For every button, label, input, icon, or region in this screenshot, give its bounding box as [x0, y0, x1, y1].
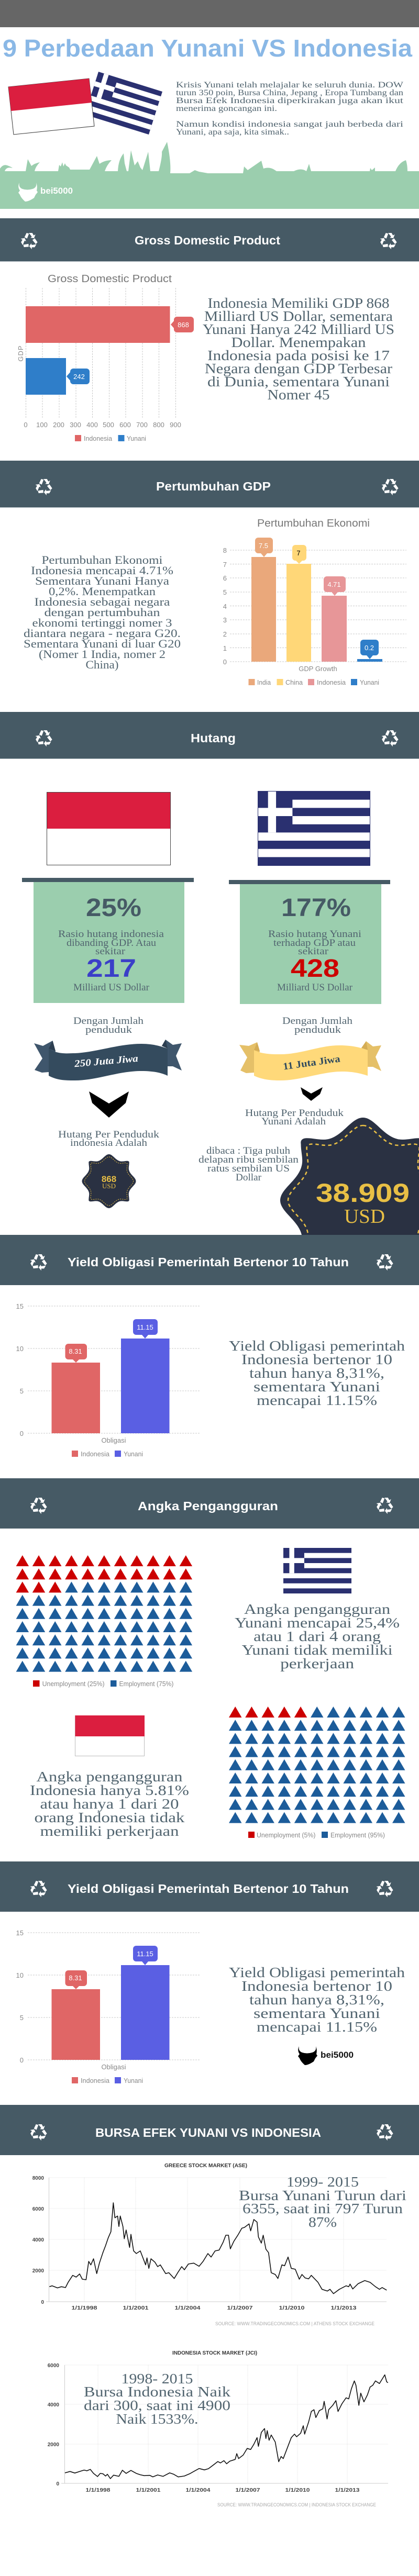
bar chart: GDP: Gross Domestic Product	[48, 273, 172, 285]
text: Indonesia stock summary: Bursa Indonesia Naik	[84, 2384, 231, 2400]
icon: recycle right	[375, 1254, 394, 1272]
flag: Indonesia small	[75, 1715, 145, 1756]
bar chart: economic growth: 8	[223, 547, 227, 554]
text: GDP explanation: Indonesia pada posisi ke 17	[207, 348, 390, 363]
text: debt per capita right: Hutang Per Penduduk	[245, 1108, 344, 1119]
bar chart: GDP: 900	[170, 421, 181, 429]
icon: recycle right	[380, 479, 400, 496]
line chart: Greece stock market: 1/1/1998	[71, 2305, 97, 2311]
text: GDP explanation: di Dunia, sementara Yunani	[207, 374, 390, 389]
bar chart: GDP	[17, 273, 194, 442]
bar chart: economic growth: Yunani	[360, 678, 379, 686]
text: Indonesia unemployment: memiliki perkerjaan	[40, 1823, 179, 1839]
text: GDP explanation: Yunani Hanya 242 Milliard US	[203, 321, 394, 337]
text: bond yield explanation	[229, 1338, 405, 1408]
ribbon: 11 Juta Jiwa: 11 Juta Jiwa	[282, 1053, 341, 1073]
line chart: Indonesia stock market: 1/1/2004	[185, 2488, 211, 2493]
line chart: Greece stock market: 1/1/2001	[123, 2305, 149, 2311]
panel: Greece debt ratio: sekitar	[298, 946, 329, 957]
bar chart: GDP: 242	[73, 373, 85, 381]
text: economic growth explanation: 0,2%. Menempatkan	[49, 585, 156, 598]
text: Greece stock summary: 87%	[308, 2214, 337, 2230]
bar chart: economic growth: 5	[223, 588, 227, 596]
logo: bei5000 white: bei5000	[40, 186, 73, 196]
line chart: Indonesia stock market	[48, 2350, 388, 2507]
icon: recycle left	[29, 2124, 48, 2142]
section header: Yield Obligasi	[0, 1235, 419, 1285]
text: economic growth explanation: Indonesia mencapai 4.71%	[31, 564, 173, 577]
flag: Indonesia	[47, 793, 171, 865]
line chart: Indonesia stock market: 1/1/2010	[285, 2488, 310, 2493]
line chart: Greece stock market: 0	[41, 2300, 44, 2305]
intro text: Bursa Efek Indonesia diperkirakan juga akan ikut	[176, 96, 404, 105]
text: economic growth explanation: dengan pertumbuhan	[44, 606, 160, 619]
icon: recycle left	[34, 730, 53, 748]
logo: bei5000 white	[18, 183, 73, 202]
text: Greece stock summary: 1999- 2015	[286, 2174, 359, 2190]
waffle chart: Greece unemployment	[16, 1555, 192, 1672]
text: economic growth explanation: (Nomer 1 India, nomer 2	[39, 648, 166, 661]
line chart: Indonesia stock market: 1/1/2001	[136, 2488, 161, 2493]
text: Greece unemployment: Angka pengangguran	[244, 1601, 391, 1617]
bar chart: GDP: 600	[119, 421, 131, 429]
text: population label right: penduduk	[294, 1024, 341, 1035]
text: GDP explanation: Dollar. Menempakan	[231, 334, 366, 350]
intro text: Krisis Yunani telah melajalar ke seluruh dunia. DOW	[176, 81, 404, 90]
badge: 868 USD: 868	[102, 1174, 116, 1184]
panel: Indonesia debt ratio: 217	[86, 955, 136, 983]
section header: Angka Pengangguran	[0, 1478, 419, 1529]
text: Indonesia unemployment: atau hanya 1 dari 20	[40, 1796, 179, 1812]
bar chart: GDP: 700	[136, 421, 148, 429]
text: reading of the number	[199, 1145, 299, 1183]
bar chart: GDP: 868	[178, 321, 189, 329]
bar chart: economic growth: 0	[223, 658, 227, 666]
bar chart: economic growth: 7	[223, 561, 227, 568]
line chart: Greece stock market: GREECE STOCK MARKET (ASE)	[164, 2163, 247, 2169]
heading: Yield Obligasi Pemerintah Bertenor 10 Tahun	[68, 1882, 349, 1895]
intro text: menerima goncangan ini.	[176, 104, 277, 113]
bar chart: economic growth: 3	[223, 616, 227, 624]
badge: 38.909 USD	[280, 1118, 419, 1283]
text: debt per capita right	[245, 1108, 344, 1127]
line chart: Indonesia stock market: 1/1/2013	[335, 2488, 360, 2493]
bar chart: GDP: Yunani	[127, 434, 146, 442]
heading: Pertumbuhan GDP	[156, 479, 271, 493]
panel: Indonesia debt ratio: dibanding GDP. Atau	[67, 938, 157, 949]
badge: 38.909 USD: USD	[344, 1206, 385, 1228]
bar chart: economic growth: 4	[223, 603, 227, 610]
bar chart: economic growth: GDP Growth	[299, 665, 337, 673]
text: Indonesia unemployment: orang Indonesia tidak	[35, 1810, 185, 1825]
text: GDP explanation	[203, 295, 394, 403]
panel: Indonesia debt ratio: Milliard US Dollar	[73, 982, 150, 993]
text: population label left: penduduk	[85, 1024, 133, 1035]
icon: recycle left	[34, 479, 53, 496]
panel: Greece debt ratio	[229, 880, 390, 1004]
legend: Indonesia unemployment: Unemployment (5%)	[257, 1831, 315, 1839]
ribbon: 250 Juta Jiwa: 250 Juta Jiwa	[73, 1053, 139, 1069]
line chart: Indonesia stock market: 1/1/2007	[236, 2488, 260, 2493]
section header: Gross Domestic Product	[0, 218, 419, 262]
logo: bei5000 black: bei5000	[321, 2050, 354, 2060]
text: Greece unemployment	[235, 1601, 400, 1671]
line chart: Greece stock market: 1/1/2007	[227, 2305, 253, 2311]
bar chart: GDP: 100	[36, 421, 48, 429]
panel: Indonesia debt ratio: 25%	[86, 894, 141, 922]
intro text: Yunani, apa saja, kita simak..	[176, 128, 289, 137]
text: reading of the number: ratus sembilan US	[207, 1163, 290, 1174]
icon: recycle right	[375, 1881, 394, 1898]
panel: Indonesia debt ratio: Rasio hutang indonesia	[58, 929, 164, 940]
bar chart: GDP: 0	[24, 421, 28, 429]
flag: Greece	[258, 791, 370, 866]
line chart: Greece stock market: SOURCE: WWW.TRADINGECONOMICS.COM | ATHENS STOCK EXCHANGE	[215, 2321, 374, 2326]
bar chart: GDP: 400	[86, 421, 98, 429]
ribbon: 250 Juta Jiwa	[34, 1040, 182, 1080]
line chart: Greece stock market: 1/1/2004	[175, 2305, 201, 2311]
panel: Greece debt ratio: Rasio hutang Yunani	[268, 929, 361, 940]
legend: Greece unemployment	[33, 1680, 174, 1688]
icon: recycle right	[380, 730, 400, 748]
text: debt per capita left: indonesia Adalah	[70, 1138, 148, 1148]
bar chart: economic growth: 6	[223, 574, 227, 582]
panel: Greece debt ratio: Milliard US Dollar	[277, 982, 353, 993]
bar chart: bond yield	[16, 1302, 200, 1458]
top bar	[0, 0, 419, 27]
bar chart: bond yield second	[16, 1929, 200, 2084]
text: economic growth explanation: China)	[86, 658, 118, 671]
text: reading of the number: dibaca : Tiga puluh	[206, 1145, 291, 1156]
panel: Greece debt ratio: 428	[291, 955, 339, 983]
text: Indonesia unemployment: Indonesia hanya 5.81%	[30, 1782, 189, 1798]
legend: Indonesia unemployment: Employment (95%)	[330, 1831, 385, 1839]
text: Greece unemployment: perkerjaan	[280, 1656, 355, 1671]
bar chart: GDP: 200	[53, 421, 64, 429]
text: reading of the number: delapan ribu sembilan	[199, 1154, 299, 1165]
text: Indonesia stock summary: dari 300, saat ini 4900	[84, 2397, 230, 2413]
panel: Greece debt ratio: terhadap GDP atau	[273, 938, 356, 949]
badge: 38.909 USD: 38.909	[316, 1178, 410, 1208]
icon: recycle right	[379, 233, 398, 250]
bar chart: GDP: GDP	[17, 345, 25, 362]
bar chart: GDP: Indonesia	[84, 434, 113, 442]
line chart: Greece stock market: 6000	[32, 2206, 44, 2212]
heading: BURSA EFEK YUNANI VS INDONESIA	[95, 2126, 321, 2139]
panel: Greece debt ratio: 177%	[281, 894, 351, 922]
text: Greece unemployment: atau 1 dari 4 orang	[253, 1629, 381, 1644]
line chart: Indonesia stock market: 6000	[48, 2363, 59, 2369]
icon: recycle left	[19, 233, 39, 250]
bar chart: economic growth: 7	[296, 549, 301, 557]
section header: Hutang	[0, 712, 419, 759]
bar chart: economic growth: 1	[223, 644, 227, 652]
text: Greece unemployment: Yunani mencapai 25,4%	[235, 1615, 400, 1631]
bar chart: GDP: 800	[153, 421, 164, 429]
arrow: chevron right	[301, 1087, 323, 1101]
text: GDP explanation: Indonesia Memiliki GDP 868	[207, 295, 390, 311]
text: Indonesia unemployment	[30, 1769, 189, 1839]
text: economic growth explanation: Pertumbuhan Ekonomi	[42, 553, 162, 566]
flag: Greece tilted	[85, 72, 162, 135]
ribbon: 11 Juta Jiwa	[239, 1041, 381, 1080]
arrow: chevron left	[89, 1091, 129, 1118]
text: reading of the number: Dollar	[236, 1172, 262, 1183]
line chart: Greece stock market: 2000	[32, 2268, 44, 2274]
bar chart: GDP: 500	[103, 421, 114, 429]
heading: Yield Obligasi Pemerintah Bertenor 10 Tahun	[68, 1255, 349, 1269]
title: 9 Perbedaan Yunani VS Indonesia	[3, 35, 412, 62]
text: debt per capita right: Yunani Adalah	[261, 1116, 326, 1127]
intro text: turun 350 poin, Bursa China, Jepang , Eropa Tumbang dan	[176, 88, 403, 97]
icon: recycle right	[375, 1498, 394, 1515]
text: GDP explanation: Negara dengan GDP Terbesar	[205, 361, 392, 376]
text: Greece stock summary: 6355, saat ini 797 Turun	[242, 2201, 403, 2216]
logo: bei5000 black	[298, 2046, 354, 2065]
intro text	[176, 81, 404, 137]
icon: recycle right	[375, 2124, 394, 2142]
text: economic growth explanation: Sementara Yunani Hanya	[35, 574, 169, 587]
line chart: Indonesia stock market: 1/1/1998	[86, 2488, 111, 2493]
text: debt per capita left: Hutang Per Penduduk	[58, 1129, 160, 1140]
text: Indonesia stock summary: Naik 1533%.	[116, 2411, 198, 2427]
legend: Greece unemployment: Employment (75%)	[119, 1680, 174, 1688]
icon: recycle left	[29, 1881, 48, 1898]
text: Indonesia unemployment: Angka pengangguran	[37, 1769, 183, 1785]
badge: 868 USD: USD	[102, 1182, 116, 1190]
bar chart: economic growth: Indonesia	[317, 678, 346, 686]
bar chart: economic growth: 2	[223, 630, 227, 638]
text: Indonesia stock summary: 1998- 2015	[122, 2371, 193, 2387]
text: economic growth explanation: ekonomi tertinggi nomer 3	[32, 616, 172, 629]
line chart: Greece stock market	[32, 2163, 387, 2326]
intro text: Namun kondisi indonesia sangat jauh berbeda dari	[176, 120, 404, 129]
bar chart: economic growth: India	[257, 678, 271, 686]
text: Greece stock summary: Bursa Yunani Turun dari	[239, 2188, 406, 2203]
flag: Indonesia tilted	[8, 79, 94, 135]
grass banner	[0, 142, 419, 209]
line chart: Indonesia stock market: SOURCE: WWW.TRADINGECONOMICS.COM | INDONESIA STOCK EXCHANGE	[217, 2502, 376, 2507]
text: population label right: Dengan Jumlah	[282, 1016, 353, 1027]
text: Indonesia stock summary	[84, 2371, 231, 2427]
text: debt per capita left	[58, 1129, 160, 1148]
section header: Bursa Efek	[0, 2105, 419, 2155]
heading: Hutang	[191, 731, 236, 745]
waffle chart: Indonesia unemployment	[229, 1707, 405, 1823]
icon: recycle left	[29, 1254, 48, 1272]
bar chart: economic growth: 4.71	[327, 581, 341, 588]
text: economic growth explanation: Sementara Yunani di luar G20	[24, 637, 181, 650]
text: Greece stock summary	[239, 2174, 406, 2230]
text: Greece unemployment: Yunani tidak memiliki	[242, 1642, 393, 1658]
line chart: Greece stock market: 8000	[32, 2176, 44, 2181]
bar chart: economic growth: Pertumbuhan Ekonomi	[257, 518, 370, 529]
line chart: Indonesia stock market: 0	[56, 2481, 59, 2487]
icon: recycle left	[29, 1498, 48, 1515]
line chart: Indonesia stock market: INDONESIA STOCK MARKET (JCI)	[172, 2350, 257, 2356]
bar chart: GDP: 300	[70, 421, 81, 429]
heading: Angka Pengangguran	[138, 1499, 278, 1513]
text: economic growth explanation: diantara negara - negara G20.	[24, 627, 181, 640]
text: population label right	[282, 1016, 353, 1035]
section header: Yield Obligasi second	[0, 1861, 419, 1912]
panel: Indonesia debt ratio	[22, 878, 194, 1003]
bar chart: economic growth: 0.2	[365, 644, 374, 652]
line chart: Greece stock market: 4000	[32, 2237, 44, 2243]
section header: Pertumbuhan GDP	[0, 461, 419, 508]
flag: Greece small	[283, 1548, 351, 1593]
heading: Gross Domestic Product	[135, 233, 280, 247]
text: GDP explanation: Nomer 45	[267, 387, 330, 403]
badge: 868 USD	[82, 1154, 136, 1208]
bar chart: economic growth	[223, 518, 406, 686]
text: economic growth explanation: Indonesia sebagai negara	[35, 595, 170, 608]
flags: Greece and Indonesia tilted	[8, 72, 162, 135]
text: population label left: Dengan Jumlah	[73, 1016, 144, 1027]
line chart: Greece stock market: 1/1/2013	[331, 2305, 357, 2311]
text: economic growth explanation	[24, 553, 181, 671]
text: GDP explanation: Milliard US Dollar, sementara	[204, 308, 393, 324]
legend: Greece unemployment: Unemployment (25%)	[42, 1680, 105, 1688]
line chart: Indonesia stock market: 2000	[48, 2442, 59, 2448]
line chart: Greece stock market: 1/1/2010	[279, 2305, 305, 2311]
bar chart: economic growth: China	[285, 678, 303, 686]
bar chart: economic growth: 7.5	[259, 542, 268, 550]
panel: Indonesia debt ratio: sekitar	[95, 946, 126, 957]
text: population label left	[73, 1016, 144, 1035]
text: bond yield explanation second	[229, 1965, 405, 2035]
line chart: Indonesia stock market: 4000	[48, 2402, 59, 2408]
legend: Indonesia unemployment	[248, 1831, 385, 1839]
